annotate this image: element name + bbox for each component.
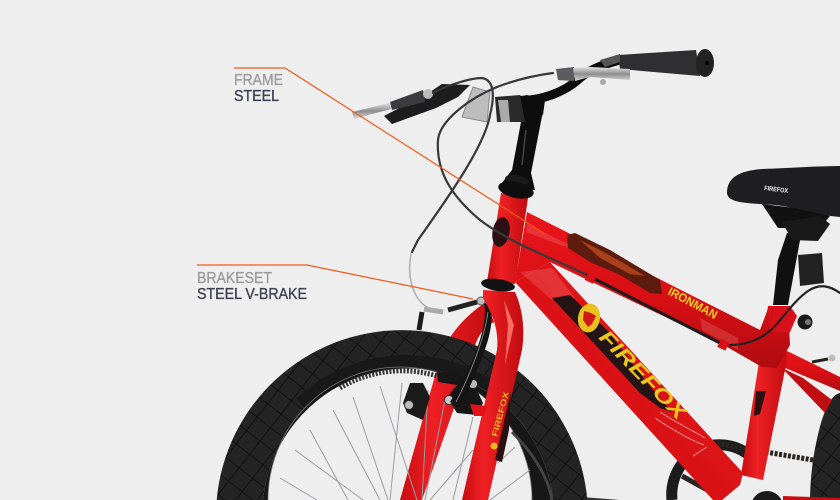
ironman logo: IRONMAN <box>666 284 720 322</box>
frame: down tube <box>515 262 743 500</box>
seat tube decal <box>754 391 766 416</box>
front tyre <box>217 330 587 500</box>
bicycle <box>217 49 840 500</box>
frame: head tube <box>487 193 528 284</box>
callout label: frame: STEEL <box>234 88 279 105</box>
head tube badge <box>490 216 512 248</box>
frame highlights <box>520 224 738 350</box>
seat clamp and bolt <box>768 306 812 332</box>
far fork leg <box>400 302 494 500</box>
firefox badge <box>576 302 602 334</box>
seat post and reflector <box>773 233 824 305</box>
drivetrain: chainring and chain <box>672 443 840 500</box>
left grip and lever <box>352 84 470 124</box>
down tube decal <box>552 295 707 456</box>
brake cables <box>410 73 840 345</box>
cable clips <box>585 273 729 351</box>
bottom bracket <box>753 491 781 500</box>
handlebar <box>495 60 620 122</box>
callout label: frame <box>234 72 283 105</box>
frame: seat stays and chain stays <box>782 350 840 413</box>
callout label: brakeset: BRAKESET <box>197 270 272 287</box>
headlamp reflector <box>462 87 490 122</box>
headset and stem <box>497 111 543 202</box>
saddle logo: FIREFOX <box>764 185 789 195</box>
callout label: brakeset: STEEL V-BRAKE <box>197 286 307 303</box>
right brake lever <box>556 54 630 85</box>
lower headset cup <box>480 277 516 293</box>
frame: seat tube <box>741 306 788 480</box>
saddle <box>727 166 840 241</box>
spokes <box>280 383 530 500</box>
ironman artwork <box>567 233 662 294</box>
callout line: brakeset <box>197 265 473 299</box>
brake caliper <box>403 297 492 420</box>
callout line: frame <box>234 68 545 234</box>
near fork leg <box>462 290 523 500</box>
front rim <box>263 367 553 500</box>
firefox logo: FIREFOX <box>594 326 692 426</box>
fork logo: FIREFOX <box>490 390 511 438</box>
callout label: brakeset <box>197 270 307 303</box>
frame: top tube <box>515 212 790 368</box>
rear wheel <box>582 393 840 500</box>
callout label: frame: FRAME <box>234 72 283 89</box>
right grip <box>618 49 714 77</box>
